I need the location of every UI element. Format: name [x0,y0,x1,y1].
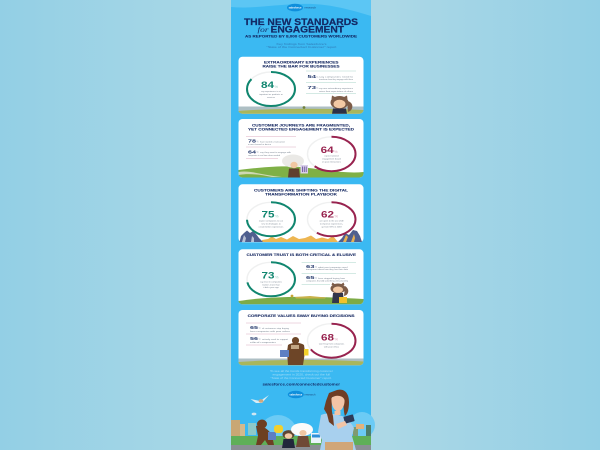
panel: customer trust [238,249,364,304]
heading [254,188,348,196]
stat lines: say companies need to [319,76,354,79]
stat lines: actively seek to support [262,338,288,341]
stat lines: 56 [250,336,258,342]
title: for [258,26,269,34]
icon: raccoon mascot [330,96,352,114]
ring chart 84% [247,72,295,106]
stat lines [246,136,296,158]
ring chart 84%: 84 [261,80,274,90]
ring chart 75%: create better experiences [259,226,284,229]
stat lines: 65 [306,275,315,281]
stat lines: say one extraordinary experience [319,87,354,90]
title [244,17,358,34]
url: salesforce.com/connectedcustomer [262,383,341,387]
stat lines: have stopped buying from [318,277,345,280]
scenery [240,230,362,242]
ring chart 62%: to improve experiences, [320,223,343,226]
ring chart 75%: expect companies to use [259,220,284,223]
ring chart 62%: up from 59% in 2018 [321,226,342,229]
icon: drone [250,395,269,415]
stat lines: % [256,140,260,143]
heading: CORPORATE VALUES SWAY BUYING DECISIONS [248,314,356,318]
footer logo: salesforce [289,392,303,396]
stat lines: 64 [248,149,256,155]
ring chart 68% [308,324,356,358]
stat lines: transparent about how they use their data [306,268,349,271]
ring chart 75% [247,202,295,236]
ring chart 84%: services [267,96,276,99]
stat lines: % [315,277,318,280]
road [231,445,371,450]
title: THE NEW STANDARDS [244,17,358,27]
panel: corporate values [238,310,364,365]
footer logo [288,391,316,398]
ring chart 73%: matters more than [262,283,281,286]
heading: RAISE THE BAR FOR BUSINESSES [262,65,340,69]
ring chart 64% [307,137,356,171]
ring chart 73%: % [275,274,279,279]
heading: EXTRAORDINARY EXPERIENCES [264,60,340,64]
ring chart 64%: engagement based [322,158,342,160]
ring chart 68%: % [334,336,338,341]
report note: Key findings from Salesforce's [276,42,327,46]
icon: raccoon mascot with bag [330,282,348,303]
stat lines: 78 [248,139,256,145]
report note: "State of the Connected Customer" report [266,45,337,49]
heading: CUSTOMER JOURNEYS ARE FRAGMENTED, [252,123,350,127]
ring chart 73%: 73 [262,270,274,280]
ring chart 64%: on past interactions [322,160,342,163]
stat lines: from companies with poor values [250,330,291,333]
ring chart 64%: expect tailored [324,155,339,158]
panel: digital transformation [238,184,364,242]
ground [238,358,364,365]
heading: CUSTOMER TRUST IS BOTH CRITICAL & ELUSIVE [246,253,357,257]
stat lines [246,323,301,345]
stat lines: % [315,266,318,269]
stat lines [306,71,356,94]
header wave [231,0,371,16]
header logo [287,4,317,11]
header logo: salesforce [289,6,302,10]
blue column [231,0,371,450]
ring chart 68%: with poor ethics [324,345,340,348]
ring chart 75%: 75 [262,209,274,219]
heading: YET CONNECTED ENGAGEMENT IS EXPECTED [248,128,355,132]
ring chart 84%: % [274,84,278,89]
ground [238,295,364,304]
panel: extraordinary experiences [238,57,364,114]
footer logo: research [304,392,316,396]
ring chart 84%: important as products or [259,93,283,96]
footer text: "State of the Connected Customer" report. [270,376,332,380]
ring chart 64%: 64 [321,145,334,155]
stat lines: transform how they engage with them [319,78,353,81]
title: ENGAGEMENT [270,24,345,34]
stat lines: % [258,327,262,330]
ring chart 62%: are open to the use of AI [320,220,344,223]
footer text [270,369,333,380]
stat lines: % [258,338,262,341]
footer text: To see all the trends transforming customer [270,369,333,373]
icon: astro [282,430,295,448]
ring chart 73%: it did a year ago [263,286,280,289]
stat lines: ethical companies [250,341,277,344]
stat lines: have started a transaction [260,140,286,143]
heading [262,60,340,69]
ring chart 62%: 62 [321,209,334,219]
stat lines: companies that did something untrustworthy [306,280,349,283]
ring chart 68%: won't buy from companies [319,343,345,346]
panel: customer journeys [238,119,364,178]
stat lines: in one channel or device [248,143,272,146]
icon: bear mascot with bags [280,337,308,365]
ring chart 73% [247,262,295,296]
stat lines: raises their expectations of others [319,90,354,93]
heading: CUSTOMERS ARE SHIFTING THE DIGITAL [254,188,348,192]
stat lines: % [316,87,319,90]
icon: woman with phone [318,390,356,450]
icon: einstein mascot [282,154,308,178]
clouds [258,412,375,450]
ring chart 84%: say experience is as [261,90,282,93]
subtitle: AS REPORTED BY 8,000 CUSTOMERS WORLDWIDE [245,35,357,39]
stat lines: of customers stop buying [262,327,290,330]
buildings [231,420,371,440]
stat lines: 73 [308,85,317,91]
heading: TRANSFORMATION PLAYBOOK [265,192,338,196]
ring chart 62% [308,202,356,236]
stat lines: 63 [306,264,315,270]
ground [238,166,364,178]
footer text: engagement in 2020, check out the full [272,373,330,377]
ground [238,106,364,114]
stat lines: companies in real time when needed [248,154,281,157]
heading [248,123,355,132]
footer scene [231,390,375,450]
ring chart 73%: say trust in companies [260,281,283,284]
stat lines: admit most companies aren't [318,266,348,269]
stat lines: % [316,76,319,79]
stat lines: 65 [250,325,258,331]
stat lines: 54 [308,74,317,80]
stat lines [302,262,356,284]
ring chart 75%: % [275,213,279,218]
stat lines: % [256,151,260,154]
ring chart 75%: new technologies to [261,223,281,226]
report note [266,42,337,49]
stat lines: say they want to engage with [260,151,292,154]
ring chart 62%: % [334,213,338,218]
icon: einstein [291,423,321,447]
header logo: research [304,5,317,9]
ring chart 64%: % [334,149,338,154]
icon: bear [248,420,283,445]
grass [231,436,371,445]
ring chart 68%: 68 [321,332,334,342]
